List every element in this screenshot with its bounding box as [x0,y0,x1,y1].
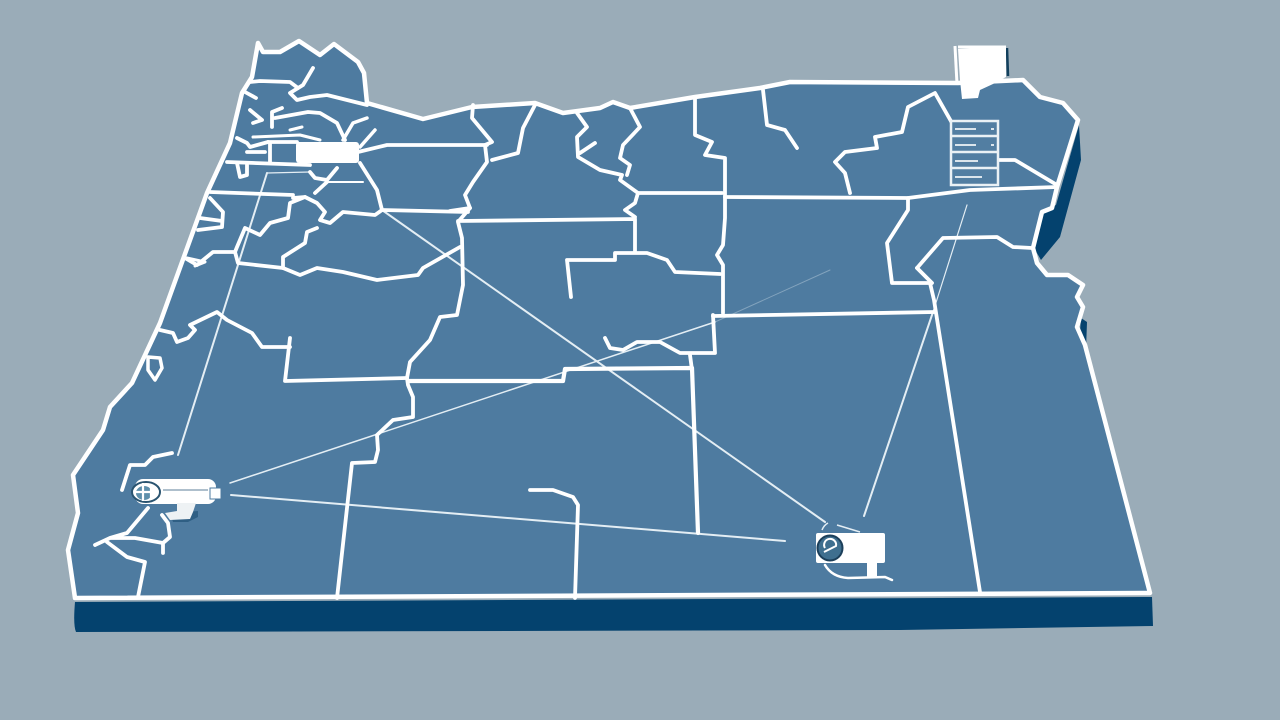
extruded bottom edge shadow [74,597,1153,632]
connector lines [178,172,967,541]
icon: document top right [955,46,1008,99]
county boundaries [95,68,1057,598]
icon: northwest document block [296,142,359,163]
state landmass [68,41,1150,598]
central boundaries [408,98,725,598]
northwest boundaries [185,68,492,598]
southwest boundaries [95,312,407,597]
icon: camera left [132,479,221,522]
eastern boundaries [713,90,1057,592]
icon: list panel [951,121,998,185]
extruded right edge lower shadow [1080,318,1087,350]
icon: camera right [816,523,892,580]
extruded right edge shadow [1034,125,1081,260]
